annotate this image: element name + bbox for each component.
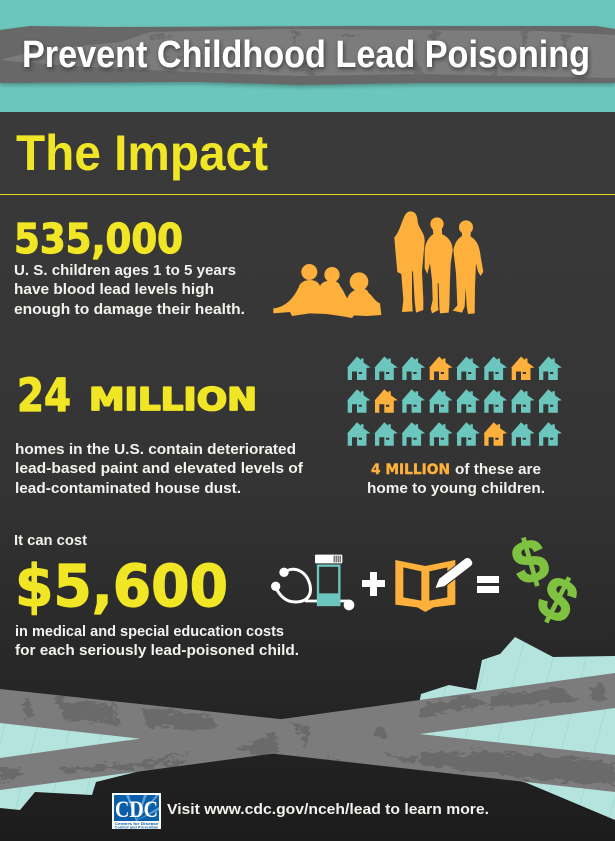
stat: 535,000 — [14, 215, 245, 318]
caption: 4 million: home to young children. — [367, 480, 545, 497]
icon: dollar signs: $ — [505, 525, 555, 598]
plus sign — [362, 572, 385, 596]
number: $5,600 — [15, 552, 228, 620]
caption: 4 million: of these are — [455, 461, 541, 478]
number — [17, 369, 257, 422]
lead-in: It can cost — [14, 532, 87, 549]
caption: 4 million: 4 MILLION — [371, 462, 450, 478]
stat: 24 million — [15, 369, 304, 497]
icon grid: houses — [347, 356, 562, 446]
heading: The Impact: The Impact — [16, 125, 268, 181]
standing girl — [394, 211, 425, 313]
description — [15, 441, 304, 497]
icon: dollar signs — [505, 525, 588, 637]
description — [14, 262, 245, 318]
description: have blood lead levels high — [14, 281, 214, 298]
description: enough to damage their health. — [14, 301, 245, 318]
description: in medical and special education costs — [15, 623, 284, 640]
footer link text: Visit www.cdc.gov/nceh/lead to learn more. — [167, 801, 489, 818]
caption: 4 million — [367, 461, 545, 497]
equals sign — [477, 576, 499, 593]
icon: dollar signs: $ — [528, 562, 588, 637]
description: for each seriously lead-poisoned child. — [15, 642, 299, 659]
CDC logo: CDC — [115, 797, 158, 822]
tape strip: falling left to right — [0, 689, 615, 792]
icon: children silhouettes — [273, 211, 483, 318]
standing boy — [425, 217, 453, 313]
stat: $5,600 — [14, 532, 299, 659]
header tape with title — [0, 26, 615, 85]
standing small boy — [453, 220, 483, 314]
description: U. S. children ages 1 to 5 years — [14, 262, 236, 279]
number: 24 — [17, 369, 71, 422]
teal header band — [0, 0, 615, 112]
description: lead-based paint and elevated levels of — [15, 460, 304, 477]
torn light teal paper, left — [0, 720, 152, 810]
CDC logo: Centers for Disease — [114, 821, 159, 826]
icon: stethoscope and medicine bottle — [271, 555, 354, 610]
description — [15, 623, 299, 659]
torn light teal paper, right — [410, 637, 615, 820]
number: MILLION — [89, 382, 257, 418]
description: homes in the U.S. contain deteriorated — [15, 441, 296, 458]
description: lead-contaminated house dust. — [15, 480, 241, 497]
CDC logo — [112, 793, 161, 830]
number: 535,000 — [14, 215, 183, 263]
seated toddlers — [273, 264, 381, 318]
tape strip: rising left to right — [0, 673, 615, 790]
yellow divider — [0, 194, 615, 195]
icon: open book and pencil — [395, 557, 473, 612]
CDC logo: Control and Prevention — [114, 826, 158, 830]
